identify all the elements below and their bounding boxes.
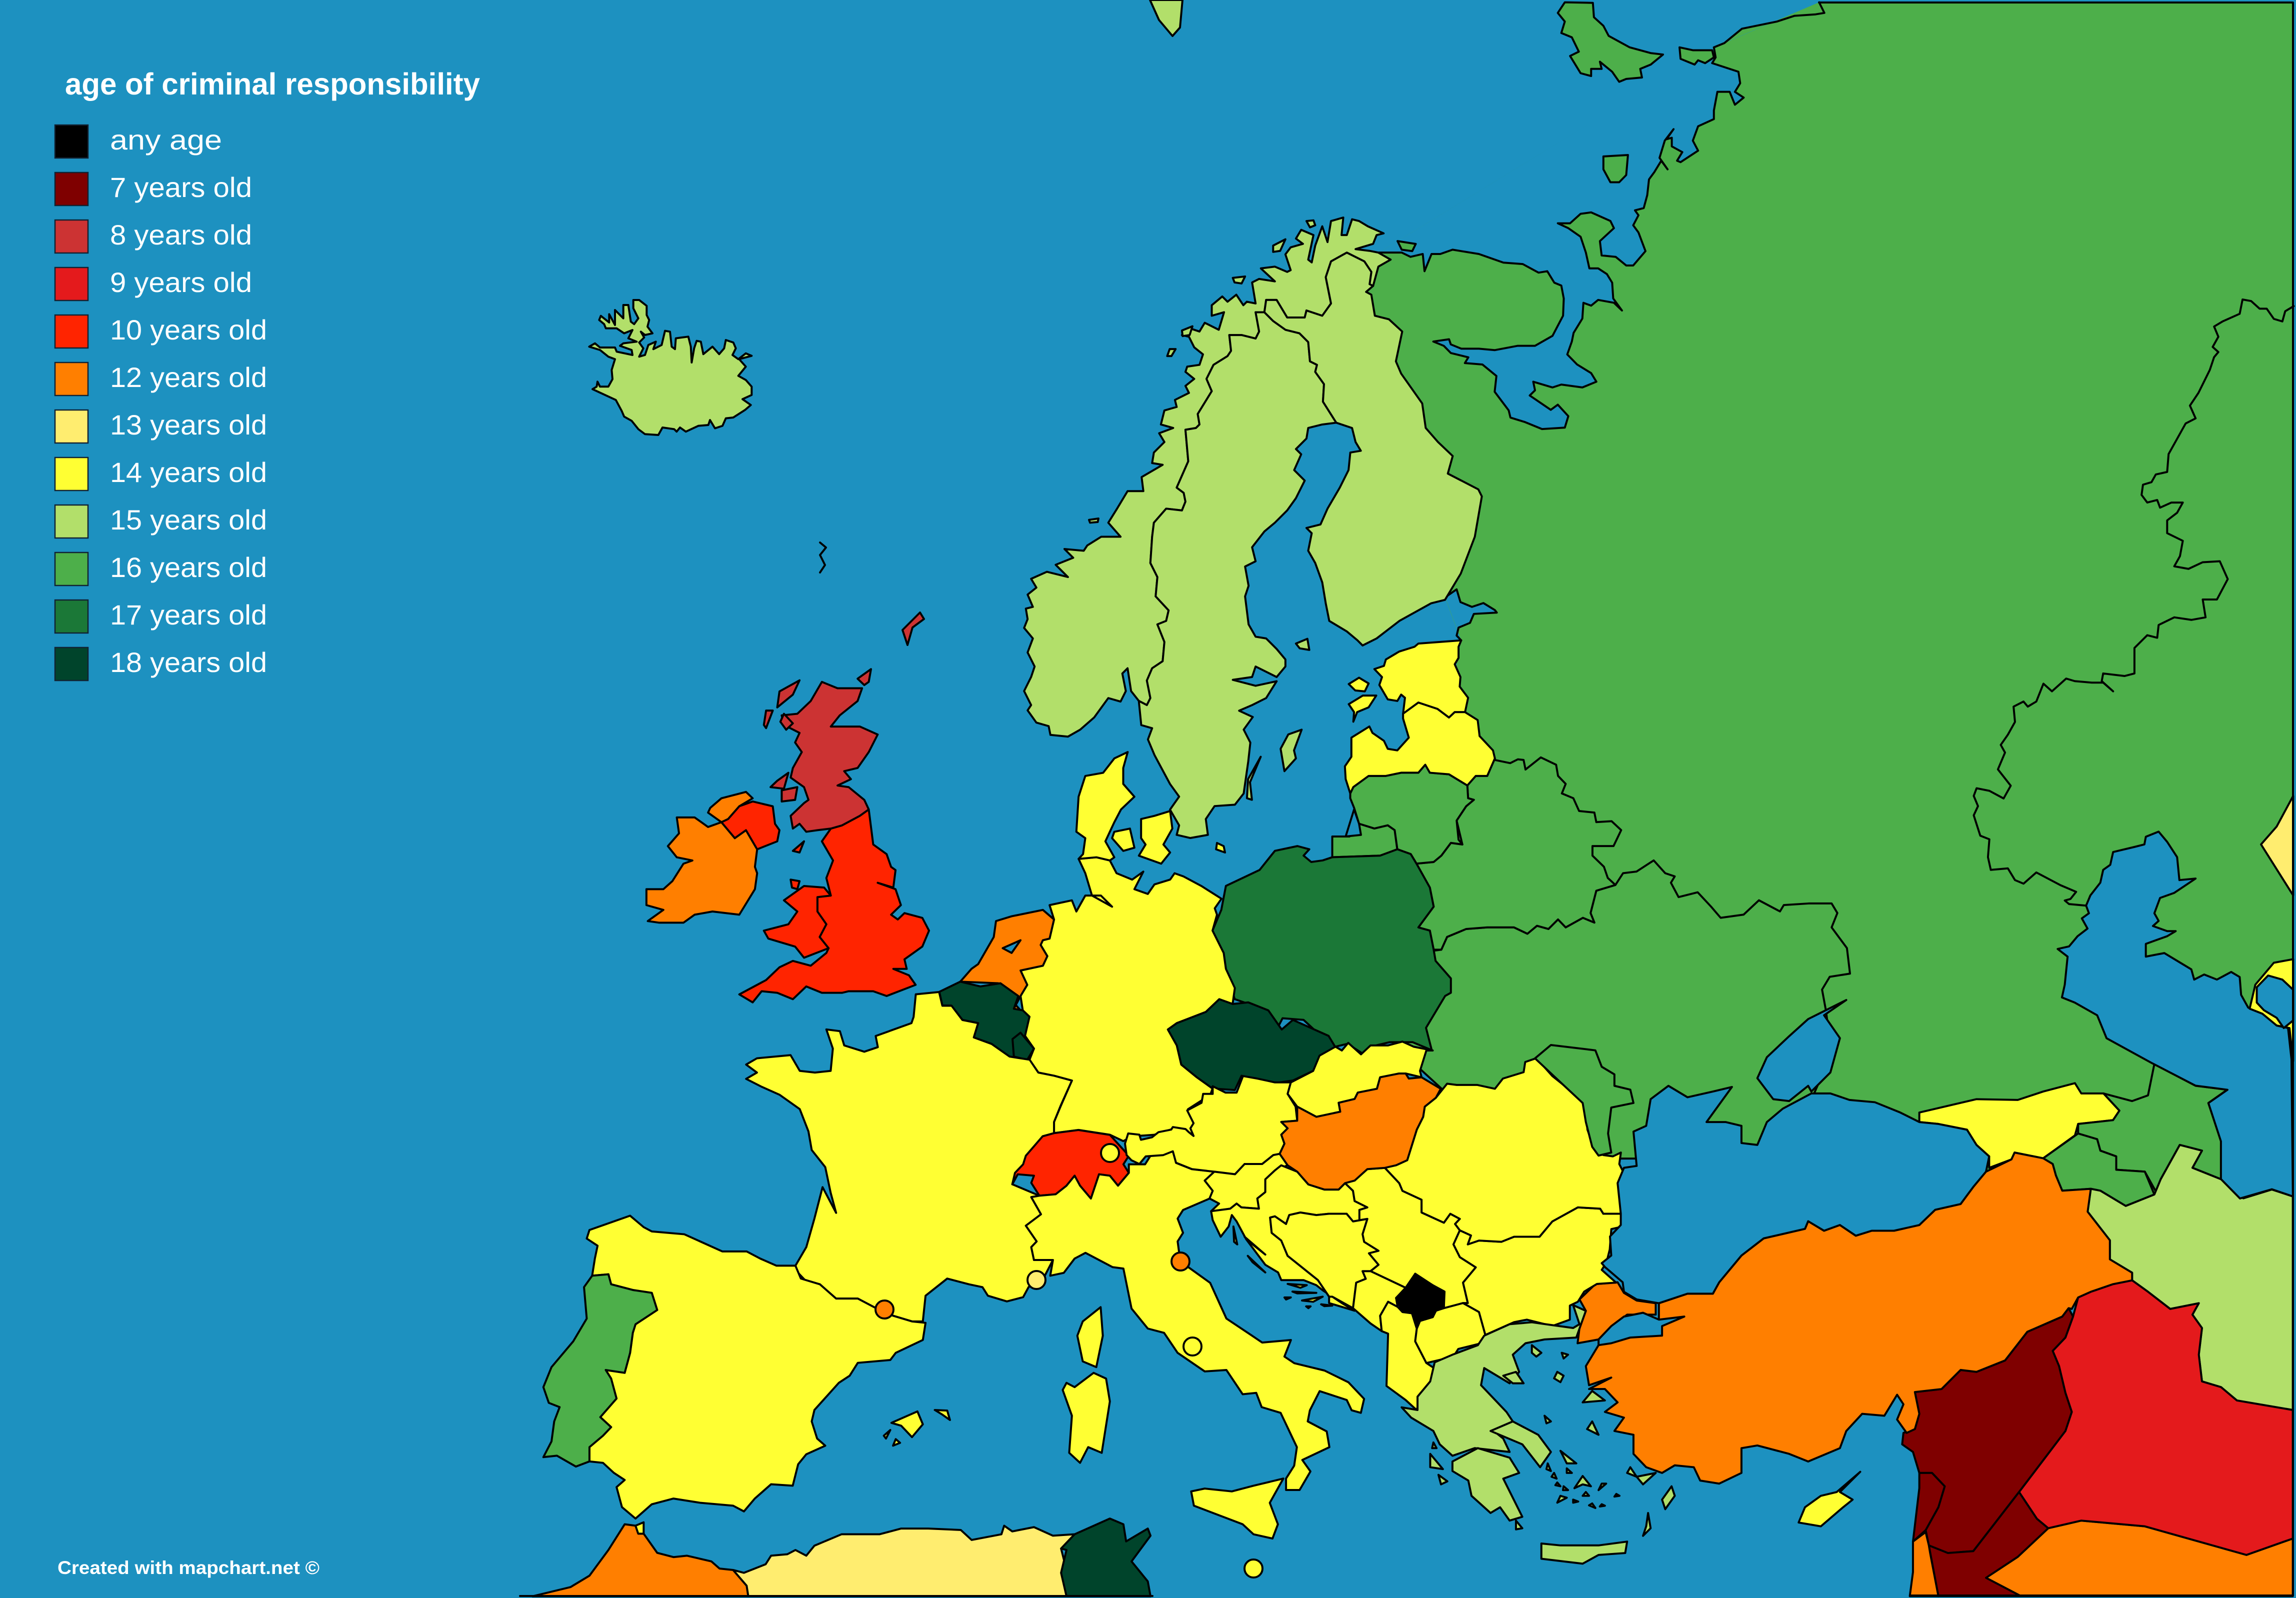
islands: Dalmatian [1234, 1226, 1332, 1308]
microstate: Liechtenstein [1101, 1144, 1119, 1162]
country: Albania [1380, 1302, 1436, 1410]
sea: Caspian [2058, 832, 2293, 1198]
country: Israel [1910, 1532, 1938, 1596]
island: Cyprus [1798, 1472, 1860, 1526]
sea: Marmara [1598, 1312, 1684, 1345]
country: Algeria [733, 1526, 1074, 1596]
legend item: 12 years old: 12 years old [110, 362, 267, 393]
country: Armenia [2043, 1134, 2154, 1206]
sea: Gulf of Finland [1445, 590, 1497, 640]
microstate: Vatican [1184, 1338, 1202, 1356]
islands: Swedish Baltic and Aland [1247, 639, 1310, 800]
islands: Estonian [1348, 678, 1376, 722]
country: Switzerland [1012, 1130, 1129, 1198]
country: Italy [1026, 1152, 1364, 1490]
country: Ireland [646, 818, 757, 922]
legend item: 16 years old: 16 years old [110, 552, 267, 583]
country: Wales [764, 886, 831, 958]
sea: Azov [1758, 1000, 1846, 1101]
islands: Balearic [884, 1410, 950, 1446]
country: Syria [1902, 1308, 2073, 1553]
country: Iran [2088, 1145, 2293, 1410]
country: Tunisia [1061, 1518, 1150, 1596]
country: Bulgaria [1454, 1208, 1622, 1335]
legend item: 18 years old [55, 646, 267, 680]
island: Euboea [1490, 1422, 1551, 1467]
legend item: 14 years old [55, 456, 267, 490]
islands: Norwegian coast [1089, 220, 1315, 522]
legend item: 9 years old [55, 266, 252, 300]
legend item: 10 years old: 10 years old [110, 314, 267, 346]
region: Donegal [708, 792, 752, 822]
country: Slovakia [1288, 1042, 1432, 1117]
country: Kosovo [1396, 1274, 1444, 1328]
country: Estonia [1374, 640, 1468, 718]
country: Scotland [782, 682, 878, 832]
legend item: 14 years old: 14 years old [110, 456, 267, 488]
country: Germany [1020, 858, 1235, 1141]
border: Russia and Kazakhstan [1974, 300, 2294, 906]
legend item: any age: any age [110, 124, 222, 156]
islands: Arctic Russia [1398, 2, 1714, 251]
central Europe and Balkans [1125, 1042, 1625, 1410]
country: Denmark [1076, 752, 1225, 864]
legend item: 7 years old [55, 172, 252, 206]
country: Netherlands [960, 910, 1054, 1010]
legend item: 16 years old [55, 552, 267, 586]
lagoon: Curonian [1346, 810, 1361, 836]
country: France [746, 992, 1072, 1322]
map frame edges [520, 2, 2293, 1596]
country: Spain [586, 1216, 926, 1518]
legend item: 17 years old: 17 years old [110, 599, 267, 630]
islands: Anglesey and Man [790, 842, 804, 889]
title: age of criminal responsibility [65, 67, 480, 101]
country: Sweden [1139, 312, 1336, 838]
island: Crete [1542, 1542, 1627, 1564]
legend item: 12 years old [55, 362, 267, 396]
microstate: San Marino [1172, 1252, 1190, 1270]
country: Croatia [1211, 1166, 1368, 1310]
Baltic states and islands [1247, 639, 1495, 800]
country: Serbia [1345, 1168, 1476, 1308]
country: Slovenia [1204, 1154, 1288, 1211]
country: Turkey, Thrace [1578, 1282, 1656, 1344]
legend item: 9 years old: 9 years old [110, 266, 252, 298]
islands: Aegean [1430, 1345, 1675, 1536]
island: Iceland [589, 300, 752, 435]
legend item: 8 years old [55, 219, 252, 253]
country: North Macedonia [1415, 1303, 1486, 1363]
country: Finland [1264, 252, 1482, 646]
country: Belarus [1416, 758, 1621, 950]
island: Svalbard fragment [1150, 0, 1182, 36]
country: Greece [1402, 1305, 1675, 1564]
country: Iraq [2019, 1280, 2293, 1555]
country: Portugal [544, 1274, 657, 1466]
country: Turkey, Anatolia [1586, 1152, 2132, 1484]
country: Jordan [1929, 1492, 2048, 1596]
microstate: Monaco [1028, 1271, 1046, 1289]
legend item: 17 years old [55, 599, 267, 633]
country: Latvia [1345, 702, 1495, 794]
sea: Black Sea [1602, 1086, 1989, 1303]
country: Lebanon [1913, 1473, 1944, 1542]
country: Hungary [1280, 1074, 1440, 1190]
legend item: 15 years old [55, 504, 267, 538]
country: Belgium [940, 982, 1034, 1060]
legend item: 7 years old: 7 years old [110, 172, 252, 203]
islands: Sicily [1191, 1478, 1284, 1538]
country: Bosnia [1270, 1212, 1378, 1308]
islands: Corsica [1078, 1307, 1103, 1367]
legend item: 13 years old [55, 409, 267, 443]
country: Norway [1024, 218, 1390, 736]
country: Austria [1125, 1076, 1297, 1174]
country: Montenegro [1353, 1271, 1406, 1331]
legend item: 10 years old [55, 314, 267, 348]
country: Czechia [1168, 999, 1336, 1090]
country: Poland [1212, 846, 1451, 1055]
country: Uzbekistan [2261, 796, 2293, 896]
region: Peloponnese [1452, 1448, 1522, 1520]
microstate: Andorra [876, 1300, 894, 1318]
islands: Scottish [764, 669, 871, 802]
legend item: any age [55, 124, 222, 158]
region: Northern Ireland [722, 802, 780, 850]
islands: Sardinia [1062, 1373, 1110, 1463]
legend item: 15 years old: 15 years old [110, 504, 267, 536]
credit: Created with mapchart.net © [58, 1558, 320, 1578]
country: Kaliningrad [1332, 820, 1398, 857]
sea: Barents and White Sea [1379, 48, 1744, 429]
legend [55, 124, 267, 680]
legend item: 13 years old: 13 years old [110, 409, 267, 440]
microstate: Malta [1244, 1560, 1262, 1578]
country: Ukraine [1403, 860, 1850, 1158]
legend item: 8 years old: 8 years old [110, 219, 252, 250]
country: Moldova [1535, 1045, 1634, 1156]
islands: Shetland and Faroe [820, 542, 924, 645]
country: Georgia [1920, 1083, 2120, 1168]
coast: northern Russia top [1714, 2, 1824, 48]
country: Saudi Arabia [1986, 1520, 2293, 1596]
country: Azerbaijan [2078, 1064, 2228, 1194]
country: Turkmenistan [2250, 959, 2293, 1061]
bay: Kara-Bogaz [2257, 976, 2293, 1028]
legend item: 18 years old: 18 years old [110, 646, 267, 678]
territory: Ceuta [636, 1522, 644, 1534]
country: England [740, 810, 929, 1002]
country: Romania [1385, 1058, 1625, 1244]
North Africa [532, 1518, 1150, 1596]
country: Lithuania [1350, 764, 1474, 864]
map: Russia and eastern landmass [1361, 2, 2293, 1250]
country: Morocco [532, 1524, 748, 1596]
